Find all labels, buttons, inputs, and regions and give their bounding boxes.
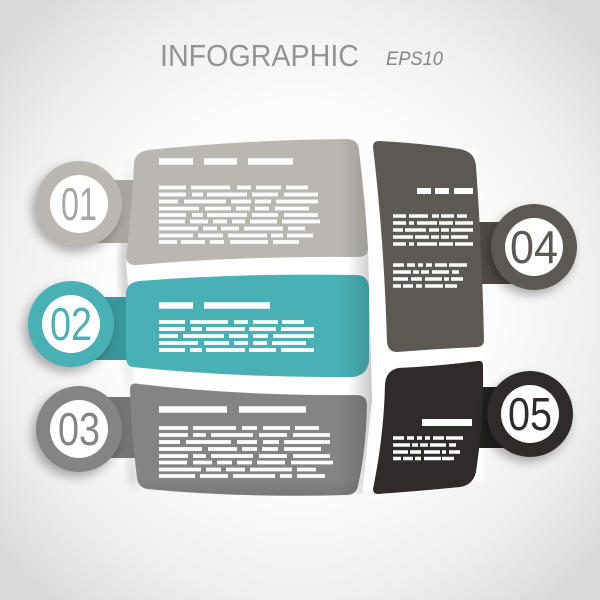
badge 02 [28, 281, 114, 367]
badge 04: 04 [510, 221, 558, 273]
subtitle: EPS10 [386, 48, 443, 70]
text bars 04 upper [393, 216, 473, 244]
badge shadow 03 [32, 391, 118, 477]
title: INFOGRAPHIC [160, 38, 359, 73]
badge 02: 02 [50, 298, 92, 350]
badge 01: 01 [61, 178, 97, 230]
heading bars 03 [159, 406, 306, 413]
badge shadow 05 [484, 376, 570, 462]
heading bars 01 [159, 158, 293, 165]
connector tab 02 [71, 297, 131, 360]
card 02 [126, 275, 369, 377]
connector tab 05 [475, 387, 530, 448]
panel: 02 [24, 275, 369, 377]
text bars 04 lower [393, 265, 467, 286]
text bars 02 [159, 322, 314, 350]
text bars 01 [159, 188, 320, 242]
badge 01 [36, 161, 122, 247]
sheet shadow [120, 160, 136, 492]
card 01 [126, 139, 368, 265]
connector tab 03 [79, 397, 141, 458]
card 03 [130, 384, 367, 496]
panel: 03 [32, 384, 367, 496]
text bars 05 [393, 438, 463, 458]
heading bar 05 [422, 419, 472, 426]
badge 03 [36, 386, 122, 472]
panel: 05 [373, 361, 573, 494]
heading bars 02 [159, 302, 270, 309]
heading bars 04 [417, 188, 473, 194]
badge 04 [491, 204, 577, 290]
badge 03: 03 [58, 403, 100, 455]
panel: 01 [32, 139, 368, 265]
badge shadow 04 [488, 209, 574, 295]
connector tab 04 [475, 222, 534, 284]
panel: 04 [373, 141, 577, 352]
badge shadow 02 [24, 286, 110, 372]
white backing sheet [126, 140, 372, 494]
card 04 [373, 141, 484, 352]
text bars 03 [159, 428, 333, 476]
card 05 [373, 361, 483, 494]
badge 05: 05 [508, 388, 552, 440]
connector tab 01 [79, 180, 141, 243]
badge shadow 01 [32, 166, 118, 252]
badge 05 [487, 371, 573, 457]
